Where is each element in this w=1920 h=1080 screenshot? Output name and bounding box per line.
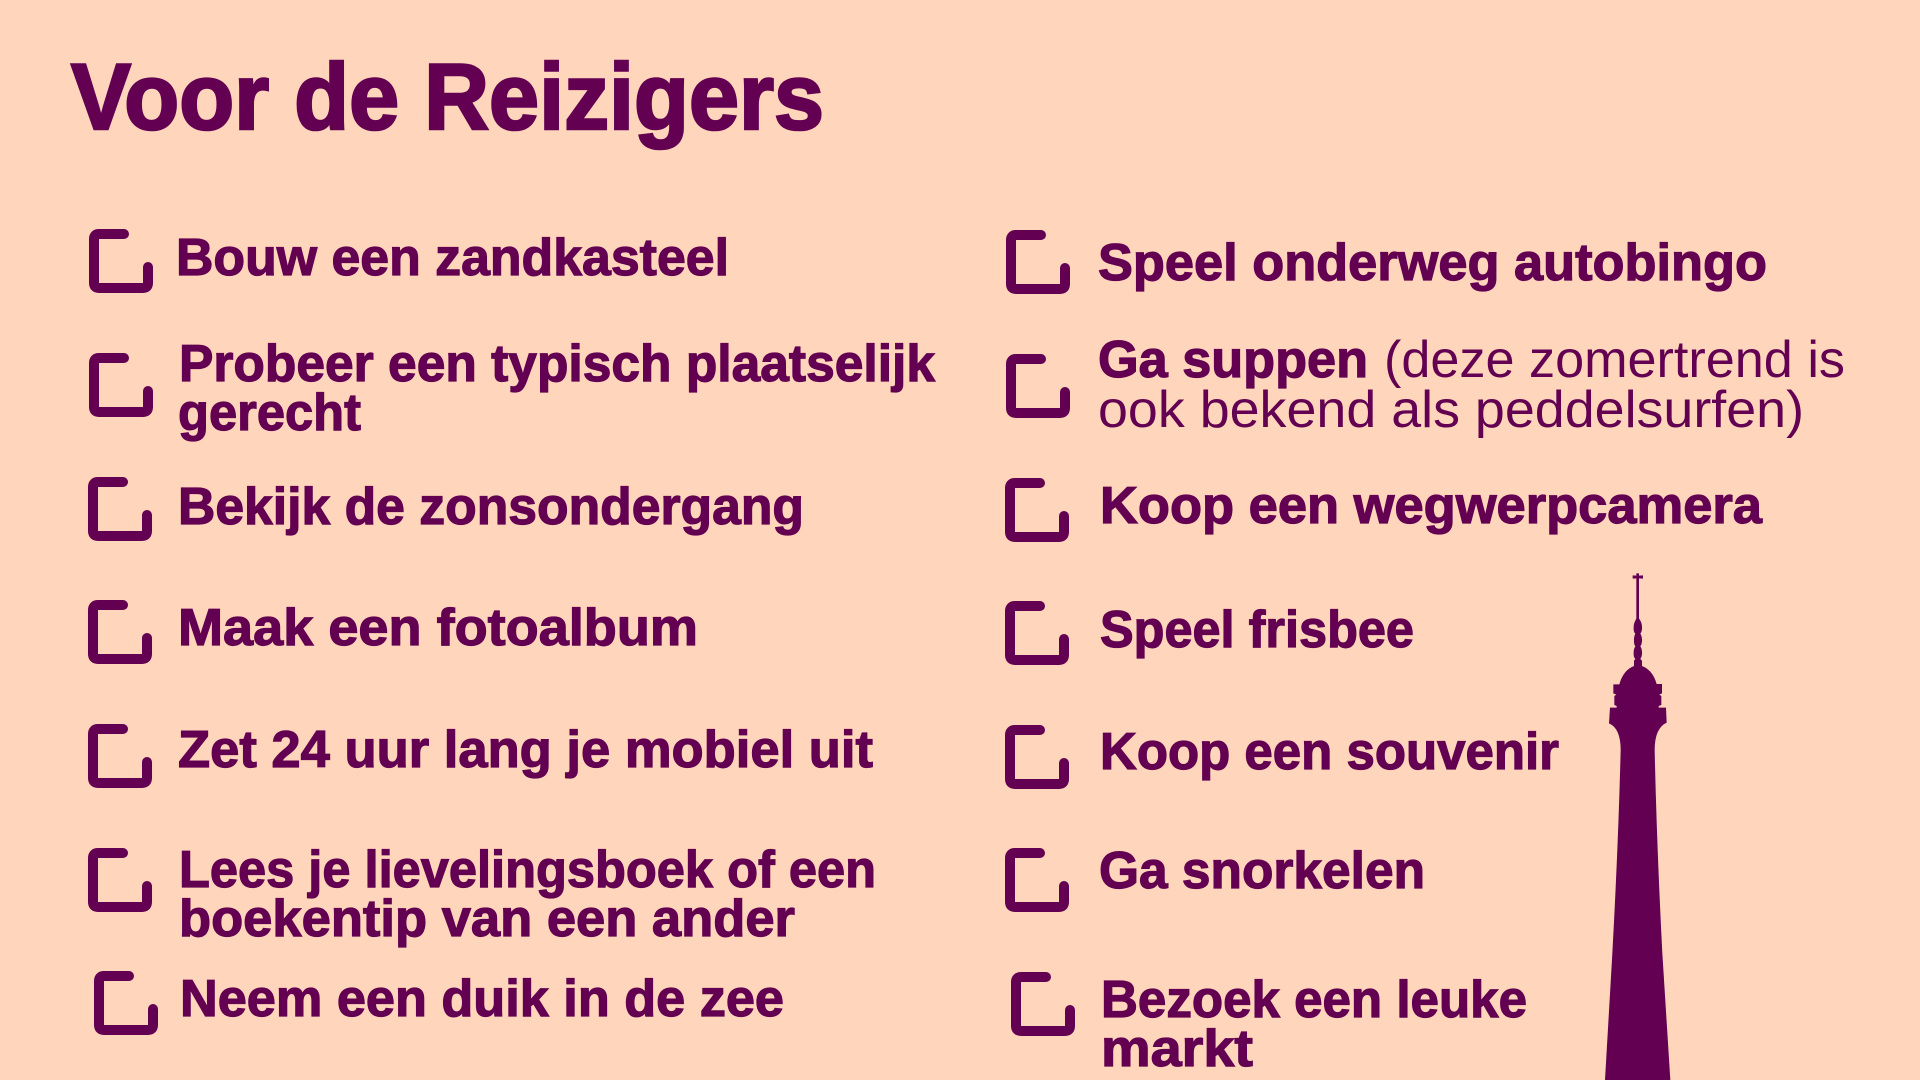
item: Lees je lievelingsboek of een boekentip van een ander (93, 841, 876, 948)
item text: Zet 24 uur lang je mobiel uit (178, 721, 873, 779)
checkbox (1011, 359, 1065, 413)
icon: tower silhouette (1605, 573, 1670, 1080)
panel: left checklist (93, 229, 935, 1030)
item text: Ga snorkelen (1099, 842, 1425, 900)
checkbox (94, 234, 148, 288)
checkbox (93, 605, 147, 659)
item text: Bezoek een leuke (1101, 971, 1527, 1029)
item text: Lees je lievelingsboek of een (179, 841, 876, 899)
checkbox (1010, 606, 1064, 660)
checkbox (93, 729, 147, 783)
item: Maak een fotoalbum (93, 599, 698, 659)
item text: Speel frisbee (1100, 601, 1414, 659)
item text: Maak een fotoalbum (178, 599, 698, 657)
item text: Koop een wegwerpcamera (1100, 477, 1763, 535)
checkbox (94, 358, 148, 412)
item: Bekijk de zonsondergang (93, 478, 804, 536)
item: Bouw een zandkasteel (94, 229, 729, 288)
item: Speel frisbee (1010, 601, 1414, 660)
item text: boekentip van een ander (179, 890, 795, 948)
checkbox (1010, 853, 1064, 907)
item text: Koop een souvenir (1100, 723, 1559, 781)
item: Bezoek een leuke markt (1016, 971, 1527, 1078)
item text: Ga suppen (1098, 331, 1368, 389)
item text (1101, 971, 1527, 1078)
item text: gerecht (178, 384, 361, 442)
item: Ga suppen (1011, 331, 1845, 439)
item text: ook bekend als peddelsurfen) (1098, 381, 1804, 439)
item: Koop een wegwerpcamera (1010, 477, 1763, 537)
item text: Probeer een typisch plaatselijk (179, 335, 935, 393)
item: Koop een souvenir (1010, 723, 1559, 784)
title: Voor de Reizigers (71, 44, 824, 149)
item: Neem een duik in de zee (99, 970, 784, 1030)
item text (179, 841, 876, 948)
item text: Neem een duik in de zee (180, 970, 784, 1028)
checkbox (93, 482, 147, 536)
item text: Bouw een zandkasteel (176, 229, 729, 287)
item text (1098, 331, 1845, 439)
checkbox (93, 853, 147, 907)
item text: Speel onderweg autobingo (1098, 234, 1767, 292)
item text: Bekijk de zonsondergang (178, 478, 804, 536)
item: Zet 24 uur lang je mobiel uit (93, 721, 873, 783)
item text (178, 335, 935, 442)
item: Probeer een typisch plaatselijk gerecht (94, 335, 935, 442)
checkbox (1010, 483, 1064, 537)
item text: markt (1101, 1020, 1253, 1078)
panel: right checklist (1010, 234, 1845, 1078)
checkbox (99, 976, 153, 1030)
item: Speel onderweg autobingo (1011, 234, 1767, 292)
checkbox (1011, 235, 1065, 289)
item: Ga snorkelen (1010, 842, 1425, 907)
item text: (deze zomertrend is (1384, 331, 1845, 389)
checkbox (1016, 977, 1070, 1031)
checkbox (1010, 730, 1064, 784)
